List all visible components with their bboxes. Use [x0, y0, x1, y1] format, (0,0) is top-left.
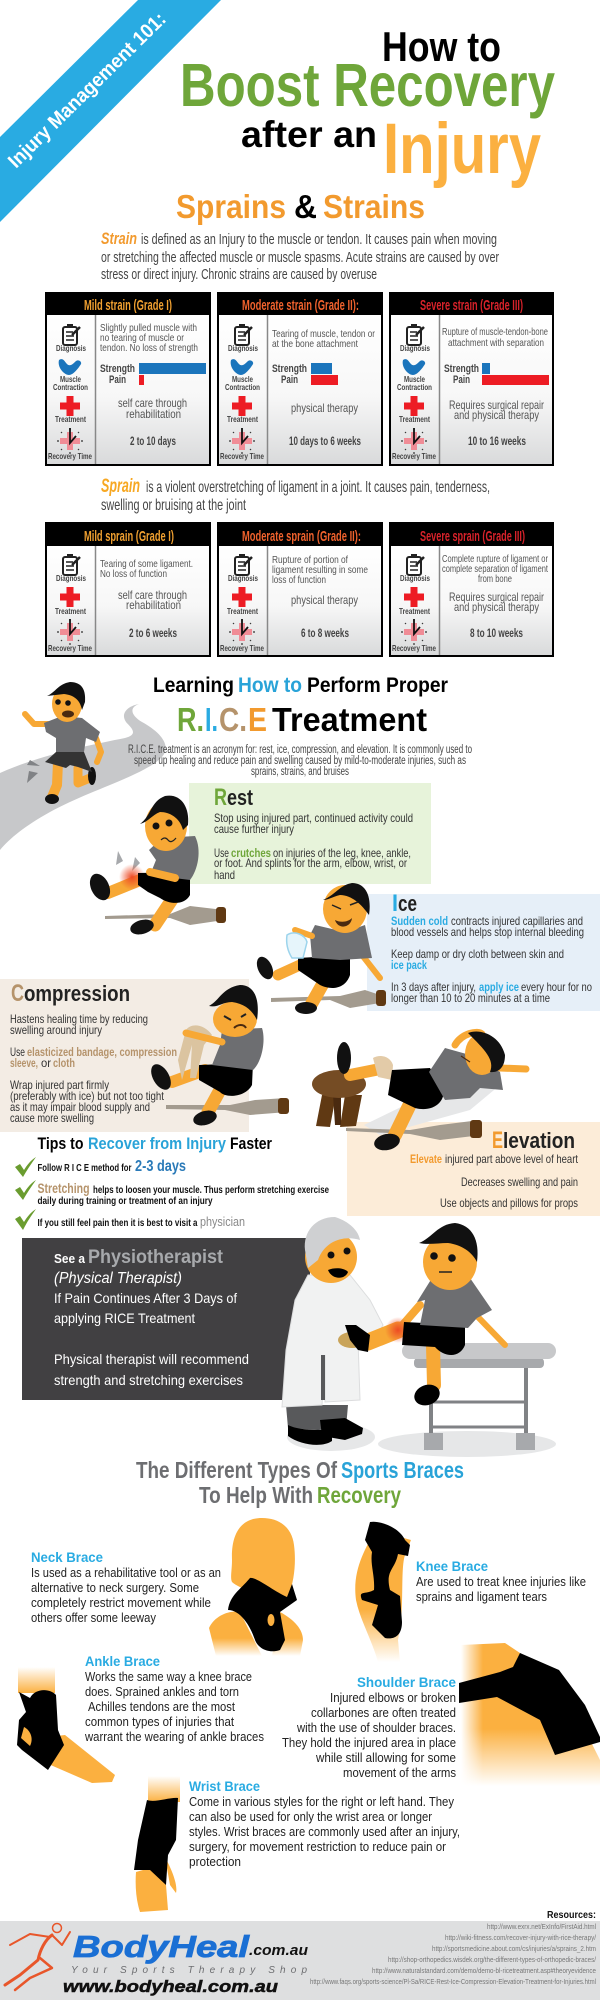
panel: mild sprain [45, 522, 211, 657]
panel: mild strain: Strength [100, 363, 135, 375]
text: wrist brace: protection [189, 1855, 241, 1869]
icon: shoulder brace [459, 1640, 600, 1788]
tip 2: daily during training or treatment of an injury [38, 1196, 213, 1207]
panel: severe sprain: Complete rupture of ligament or [442, 553, 548, 565]
text: shoulder brace: movement of the arms [343, 1766, 456, 1780]
text: strain definition [101, 229, 499, 283]
panel: ice: In 3 days after injury, [391, 980, 476, 994]
text: wrist brace: can also be used for only the wrist area or longer [189, 1810, 432, 1824]
heading: sports braces: To Help With [199, 1482, 313, 1508]
heading: R.I.C.E Treatment: R. [177, 701, 204, 738]
heading: R.I.C.E Treatment: I. [205, 701, 218, 738]
panel: mild sprain: Recovery Time [48, 643, 92, 653]
text: ankle brace: Works the same way a knee brace [85, 1670, 252, 1684]
text: RICE description: sprains, strains, and bruises [251, 766, 349, 778]
text: ankle brace: common types of injuries that [85, 1715, 234, 1729]
panel: mild sprain: rehabilitation [126, 598, 181, 612]
panel: physiotherapist: applying RICE Treatment [54, 1310, 195, 1326]
panel: severe strain: Diagnosis [400, 343, 430, 353]
panel: compression: Wrap injured part firmly [10, 1078, 109, 1092]
heading: Learning How to Perform Proper: How to [238, 674, 302, 697]
icon: knee brace [355, 1522, 411, 1662]
panel: ice: apply ice [479, 980, 519, 994]
panel: physiotherapist: (Physical Therapist) [54, 1270, 182, 1287]
panel: moderate strain: Contraction [225, 382, 260, 392]
panel: ice [367, 890, 600, 1011]
panel: compression: cause more swelling [10, 1111, 94, 1125]
text: ankle brace: Achilles tendons are the most [88, 1700, 235, 1714]
text: shoulder brace: while still allowing for some [315, 1751, 456, 1765]
panel: severe strain [389, 292, 554, 466]
tip 2 [15, 1180, 329, 1207]
panel: mild strain: tendon. No loss of strength [100, 342, 198, 354]
text: knee brace: Are used to treat knee injuries like [416, 1575, 586, 1589]
text: elevation: Elevate [410, 1152, 442, 1166]
panel: physiotherapist [22, 1238, 310, 1400]
tip 1: 2-3 days [135, 1158, 186, 1175]
title [180, 23, 555, 189]
panel: moderate strain: physical therapy [291, 401, 358, 415]
heading: tips: Recover from Injury [88, 1134, 226, 1153]
panel: mild sprain: Mild sprain (Grade I) [84, 528, 174, 545]
panel: rest: R [214, 784, 227, 811]
heading: sports braces: The Different Types Of [136, 1457, 337, 1483]
text: sprain definition: Sprain [101, 476, 140, 497]
text: strain definition: Strain [101, 229, 137, 248]
tip 3: If you still feel pain then it is best to visit a [38, 1218, 198, 1229]
panel: severe strain: and physical therapy [454, 408, 539, 422]
panel: mild strain: rehabilitation [126, 407, 181, 421]
panel: severe strain: Requires surgical repair [449, 398, 544, 412]
panel: mild sprain: Tearing of some ligament. [100, 558, 193, 570]
panel: severe strain: Rupture of muscle-tendon-bone [442, 326, 548, 338]
logo: runner [5, 1924, 70, 1990]
panel: mild strain: no tearing of muscle or [100, 332, 184, 344]
logo: BodyHeal: BodyHeal [73, 1929, 251, 1964]
panel: compression: Use [10, 1045, 25, 1059]
heading: tips [38, 1134, 272, 1153]
text: sprain definition [101, 476, 490, 514]
panel: moderate strain: Tearing of muscle, tendon or [272, 328, 375, 340]
tip 3: physician [200, 1214, 245, 1229]
ribbon: Injury Management 101 [0, 0, 221, 222]
panel: severe sprain: Requires surgical repair [449, 590, 544, 604]
panel: severe strain: Strength [444, 363, 479, 375]
heading: R.I.C.E Treatment: Treatment [272, 701, 427, 738]
panel: moderate sprain: Treatment [227, 606, 258, 616]
panel: compression: swelling around injury [10, 1023, 102, 1037]
panel: moderate strain: Moderate strain (Grade II): [242, 297, 359, 314]
panel: ice: I [392, 890, 398, 917]
tip 1 [15, 1157, 186, 1177]
tip 2: helps to loosen your muscle. Thus perform stretching exercise [93, 1185, 329, 1196]
icon: ankle brace [17, 1667, 115, 1783]
text: neck brace: Neck Brace [31, 1549, 103, 1565]
text: wrist brace: styles. Wrist braces are commonly used after an injury, [189, 1825, 460, 1839]
heading: Sprains & Strains: Sprains [176, 188, 286, 225]
panel: moderate sprain: Rupture of portion of [272, 554, 348, 566]
panel: rest: on injuries of the leg, knee, ankle, [273, 846, 411, 860]
panel: severe strain: Recovery Time [392, 451, 436, 461]
panel: physiotherapist: strength and stretching exercises [54, 1372, 243, 1388]
road behind runner [0, 704, 166, 850]
text: strain definition: stress or direct injury. Chronic strains are caused by overuse [101, 266, 377, 283]
panel: rest: or foot. And splints for the arm, elbow, wrist, or [214, 856, 407, 870]
panel: mild strain: Muscle [60, 374, 81, 384]
logo: BodyHeal [63, 1929, 308, 1996]
title: Injury [383, 110, 541, 189]
text: RICE description: speed up healing and reduce pain and swelling caused by mild-to-moderate injuries, such as [134, 755, 466, 767]
logo: BodyHeal: Your Sports Therapy Shop [71, 1965, 307, 1976]
panel: moderate strain: Strength [272, 363, 307, 375]
panel: mild strain: self care through [118, 396, 187, 410]
figure: running person [25, 682, 101, 804]
panel: moderate strain: 10 days to 6 weeks [289, 434, 361, 448]
heading: sports braces: Sports Braces [341, 1457, 464, 1483]
text: RICE description [128, 744, 472, 778]
panel: moderate sprain [217, 522, 383, 657]
resources list: Resources: [547, 1910, 596, 1921]
panel: severe strain: Contraction [397, 382, 432, 392]
panel: moderate strain: Recovery Time [220, 451, 264, 461]
heading: tips: Faster [230, 1134, 272, 1153]
text: shoulder brace: They hold the injured area in place [282, 1736, 456, 1750]
panel: rest: est [227, 785, 254, 810]
text: wrist brace: Come in various styles for the right or left hand. They [189, 1795, 455, 1809]
heading: Learning How to Perform Proper: Learning [153, 674, 234, 697]
heading: R.I.C.E Treatment [177, 701, 427, 738]
tip 1: Follow R I C E method for [38, 1163, 132, 1174]
tip 3 [15, 1209, 245, 1230]
figure: patient on table [345, 1223, 556, 1457]
figure: doctor [282, 1217, 383, 1451]
text: knee brace: sprains and ligament tears [416, 1590, 547, 1604]
panel: mild strain: Contraction [53, 382, 88, 392]
panel: moderate strain: Treatment [227, 414, 258, 424]
text: elevation: E [492, 1127, 503, 1154]
ribbon: Injury Management 101: Injury Management 101: [4, 8, 171, 173]
heading: Learning How to Perform Proper [153, 674, 448, 697]
panel: severe strain: 10 to 16 weeks [468, 434, 526, 448]
panel: ice: ce [398, 891, 417, 916]
panel: compression: sleeve, [10, 1056, 38, 1070]
panel: severe sprain: Diagnosis [400, 573, 430, 583]
panel: physiotherapist: Physiotherapist [88, 1247, 224, 1268]
text: ankle brace: warrant the wearing of ankle braces [84, 1730, 264, 1744]
text: wrist brace: surgery, for movement restriction to reduce pain or [189, 1840, 446, 1854]
text: neck brace: alternative to neck surgery. Some [31, 1581, 199, 1595]
panel: severe strain: Treatment [399, 414, 430, 424]
panel: severe sprain [389, 522, 554, 657]
panel: severe sprain: Treatment [399, 606, 430, 616]
panel: severe sprain: and physical therapy [454, 600, 539, 614]
panel: rest [189, 783, 431, 884]
text: neck brace [31, 1549, 221, 1625]
text: knee brace: Knee Brace [416, 1558, 488, 1574]
text: shoulder brace: Shoulder Brace [357, 1674, 456, 1690]
panel: compression: C [11, 980, 24, 1007]
panel: moderate sprain: Recovery Time [220, 643, 264, 653]
panel: moderate sprain: 6 to 8 weeks [301, 626, 349, 640]
panel: moderate sprain: Moderate sprain (Grade II): [242, 528, 361, 545]
panel: mild sprain: Diagnosis [56, 573, 86, 583]
panel: severe sprain: from bone [478, 573, 512, 585]
resources list [310, 1910, 596, 1986]
panel: physiotherapist: See a [54, 1251, 86, 1266]
panel: elevation [347, 1122, 600, 1216]
text: shoulder brace: with the use of shoulder braces. [296, 1721, 456, 1735]
panel: ice: longer than 10 to 20 minutes at a time [391, 991, 550, 1005]
panel: mild sprain: self care through [118, 588, 187, 602]
panel: moderate strain: Muscle [232, 374, 253, 384]
figure: resting person with crutch [86, 796, 226, 937]
panel: moderate strain [217, 292, 383, 466]
panel: moderate sprain: Diagnosis [228, 573, 258, 583]
panel: compression: elasticized bandage, compression [27, 1045, 177, 1059]
logo: BodyHeal: www.bodyheal.com.au [63, 1977, 279, 1996]
panel: mild strain: Diagnosis [56, 343, 86, 353]
panel: rest: crutches [231, 846, 271, 860]
text: sprain definition: swelling or bruising at the joint [101, 497, 246, 514]
text: neck brace: others offer some leeway [31, 1611, 157, 1625]
panel: physiotherapist: If Pain Continues After 3 Days of [54, 1290, 237, 1306]
panel: severe strain: Muscle [404, 374, 425, 384]
panel: severe sprain: Severe sprain (Grade III) [420, 528, 525, 545]
figure: person with ice pack [254, 883, 386, 1014]
footer band [0, 1921, 600, 2000]
text: neck brace: completely restrict movement while [31, 1596, 211, 1610]
title: How to [382, 23, 501, 70]
panel: compression: Hastens healing time by reducing [10, 1012, 148, 1026]
title: after an [241, 114, 377, 155]
figure: person wrapping compression bandage [147, 985, 289, 1128]
panel: mild strain: 2 to 10 days [130, 434, 176, 448]
panel: severe strain: attachment with separation [448, 337, 544, 349]
text: shoulder brace [282, 1674, 456, 1780]
heading: Sprains & Strains [176, 188, 425, 225]
panel: severe sprain: Recovery Time [392, 643, 436, 653]
panel: mild strain: Mild strain (Grade I) [84, 297, 172, 314]
panel: mild sprain: 2 to 6 weeks [129, 626, 177, 640]
panel: ice: Sudden cold [391, 914, 448, 928]
panel: severe strain: Pain [453, 374, 470, 386]
tip 2: Stretching [38, 1180, 90, 1196]
text: neck brace: Is used as a rehabilitative tool or as an [31, 1566, 221, 1580]
text: shoulder brace: Injured elbows or broken [330, 1691, 456, 1705]
panel: ice: ice pack [391, 958, 427, 972]
panel: rest: Use [214, 846, 229, 860]
panel: rest: Stop using injured part, continued activity could [214, 811, 413, 825]
panel: compression: ompression [24, 981, 130, 1006]
panel: physiotherapist: Physical therapist will recommend [54, 1351, 249, 1367]
text: knee brace [416, 1558, 586, 1604]
icon: wrist brace [134, 1776, 180, 1912]
text: wrist brace [189, 1778, 460, 1869]
text: ankle brace [84, 1653, 264, 1744]
figure: person elevating leg on stool [312, 1031, 526, 1153]
text: elevation [410, 1127, 579, 1210]
text: ankle brace: does. Sprained ankles and torn [85, 1685, 239, 1699]
panel: rest: hand [214, 868, 235, 882]
panel: mild strain: Recovery Time [48, 451, 92, 461]
panel: compression [0, 979, 249, 1132]
panel: moderate strain: Diagnosis [228, 343, 258, 353]
panel: mild strain [45, 292, 211, 466]
panel: compression: or [41, 1056, 51, 1070]
panel: moderate sprain: loss of function [272, 574, 326, 586]
logo: BodyHeal: .com.au [249, 1942, 308, 1959]
text: elevation: levation [503, 1128, 575, 1153]
panel: severe strain: Severe strain (Grade III) [420, 297, 523, 314]
panel: mild sprain: Treatment [55, 606, 86, 616]
heading: Sprains & Strains: & [294, 188, 317, 225]
heading: Sprains & Strains: Strains [323, 188, 425, 225]
panel: mild sprain: No loss of function [100, 568, 167, 580]
panel: moderate strain: Pain [281, 374, 298, 386]
panel: mild strain: Slightly pulled muscle with [100, 322, 197, 334]
panel: severe sprain: 8 to 10 weeks [470, 626, 523, 640]
heading: R.I.C.E Treatment: E [248, 701, 267, 738]
panel: moderate sprain: ligament resulting in some [272, 564, 368, 576]
panel: moderate strain: at the bone attachment [272, 338, 358, 350]
panel: compression: as it may impair blood supply and [10, 1100, 150, 1114]
icon: neck brace [209, 1518, 303, 1656]
text: ankle brace: Ankle Brace [85, 1653, 160, 1669]
heading: R.I.C.E Treatment: C. [219, 701, 247, 738]
text: wrist brace: Wrist Brace [189, 1778, 260, 1794]
panel: severe sprain: complete separation of ligament [442, 563, 548, 575]
panel: mild strain: Treatment [55, 414, 86, 424]
heading: sports braces [136, 1457, 464, 1508]
panel: compression: cloth [53, 1056, 75, 1070]
panel: mild strain: Pain [109, 374, 126, 386]
heading: tips: Tips to [38, 1134, 84, 1153]
heading: Learning How to Perform Proper: Perform Proper [307, 674, 448, 697]
heading: sports braces: Recovery [317, 1482, 401, 1508]
panel: rest: cause further injury [214, 822, 294, 836]
panel: compression: (preferably with ice) but not too tight [10, 1089, 165, 1103]
text: shoulder brace: collarbones are often treated [311, 1706, 456, 1720]
panel: moderate sprain: physical therapy [291, 593, 358, 607]
